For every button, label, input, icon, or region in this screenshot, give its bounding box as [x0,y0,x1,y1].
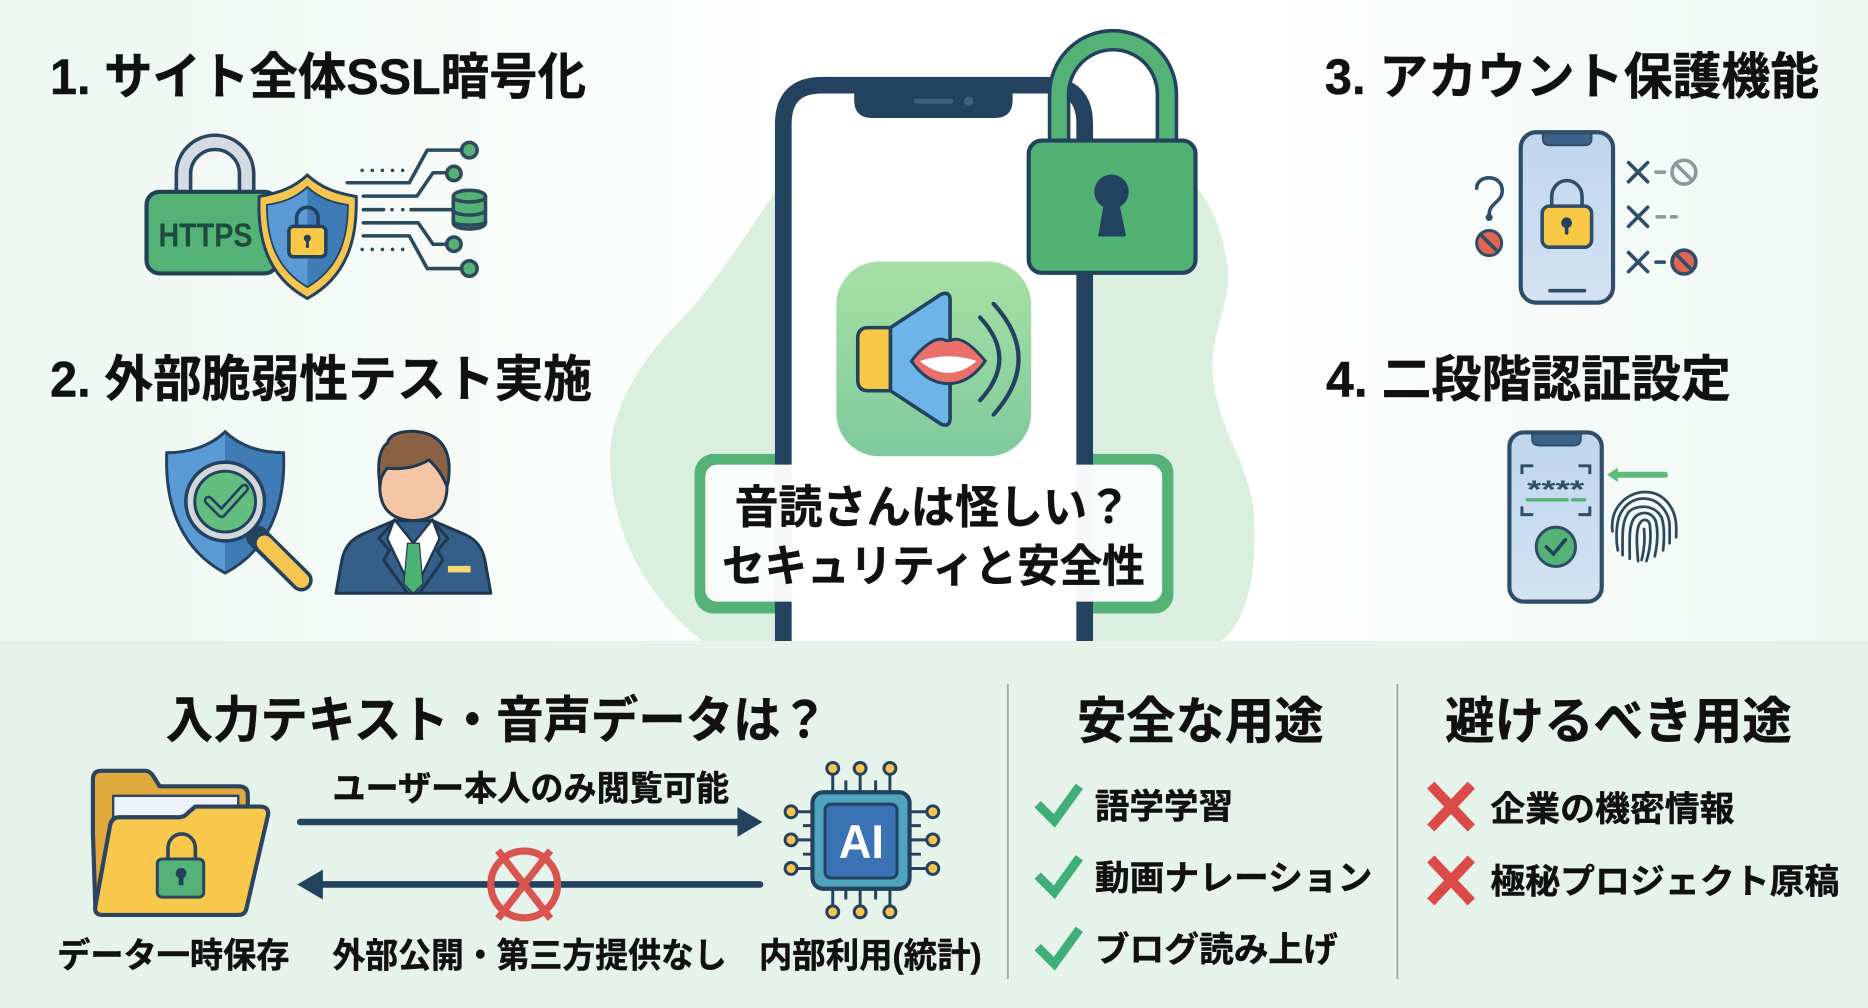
phone [783,85,1085,641]
icon: HTTPS lock and shield [147,142,356,298]
label: internal use: 内部利用(統計) [759,937,982,975]
icon: fingerprint [1612,492,1676,561]
heading 3: 3. アカウント保護機能 [1325,49,1819,105]
icon: phone with passcode [1509,432,1602,602]
icon: shield and magnifier [167,432,301,580]
icon: failed attempts [1629,160,1696,274]
panel: 1 site-wide SSL [50,49,586,298]
arrow: to AI with label [300,771,762,837]
arrow: back, blocked [297,851,760,919]
heading 2: 2. 外部脆弱性テスト実施 [50,352,592,408]
icon: locked folder [93,771,268,915]
title box border [695,454,1173,614]
panel: 2 external vulnerability test [50,352,592,593]
icon: HTTPS lock and shield: HTTPS [158,218,253,255]
app icon: speaking speaker [836,262,1031,456]
padlock [1029,40,1195,273]
item: language study: 語学学習 [1095,788,1233,826]
icon: phone with passcode: **** [1527,476,1585,504]
green blob behind phone [610,185,1255,641]
title line 1: 音読さんは怪しい？ [734,482,1131,533]
panel: 4 two-factor authentication [1326,352,1731,602]
icon: circuit lines and database [347,142,485,276]
heading 4: 4. 二段階認証設定 [1326,352,1731,408]
item: video narration: 動画ナレーション [1095,860,1372,898]
icon: locked phone [1521,132,1613,303]
panel: central hero [695,40,1195,641]
item: confidential manuscript: 極秘プロジェクト原稿 [1490,864,1839,902]
icon: AI chip [785,762,939,918]
panel: 3 account protection [1325,49,1819,303]
label: no external disclosure: 外部公開・第三方提供なし [332,937,727,975]
divider [1008,684,1397,979]
bottom band [0,641,1868,1008]
arrow: to AI with label: ユーザー本人のみ閲覧可能 [332,771,729,809]
icon: businessman [336,431,491,593]
heading: input data: 入力テキスト・音声データは？ [166,692,828,748]
panel: safe uses [1038,694,1372,969]
title text box [705,465,1162,602]
label: temporary storage: データ一時保存 [57,936,289,975]
icon: question and block mark [1477,178,1502,256]
item: blog reading: ブログ読み上げ [1095,930,1338,969]
item: corporate secrets [1431,785,1735,829]
heading: safe uses: 安全な用途 [1077,694,1324,750]
heading: uses to avoid: 避けるべき用途 [1445,694,1792,750]
panel: data handling [57,692,982,975]
item: corporate secrets: 企業の機密情報 [1490,791,1735,829]
heading 1: 1. サイト全体SSL暗号化 [50,49,586,105]
title line 2: セキュリティと安全性 [722,542,1145,591]
arrow: toward phone [1607,468,1668,482]
item: language study [1038,786,1233,826]
panel: uses to avoid [1431,694,1839,902]
icon: AI chip: AI [839,816,884,869]
